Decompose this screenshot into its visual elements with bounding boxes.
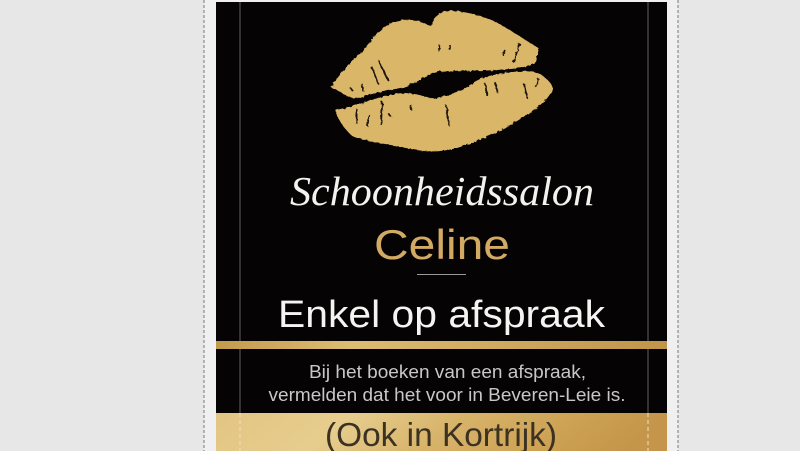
lip crease marks: [350, 43, 538, 126]
left dashed page edge: [203, 0, 205, 451]
gold footer band: [216, 413, 667, 451]
right guide line: [647, 2, 649, 413]
black flyer panel: [216, 2, 667, 413]
booking note line 1: Bij het boeken van een afspraak,: [309, 361, 586, 382]
gold band: [216, 341, 667, 349]
upper lip: [331, 11, 539, 98]
heading: Schoonheidssalon: Schoonheidssalon: [290, 168, 594, 214]
divider: [417, 274, 466, 275]
subheading: Enkel op afspraak: Enkel op afspraak: [278, 294, 606, 336]
page margin area: [204, 0, 678, 451]
lower lip: [335, 71, 553, 151]
heading: Celine: Celine: [374, 221, 510, 268]
booking note: [268, 361, 626, 405]
left guide line: [239, 2, 241, 413]
right dashed page edge: [677, 0, 679, 451]
icon: gold lips: [331, 11, 553, 151]
booking note line 2: vermelden dat het voor in Beveren-Leie is.: [268, 384, 626, 405]
footer guide lines: [240, 413, 648, 451]
